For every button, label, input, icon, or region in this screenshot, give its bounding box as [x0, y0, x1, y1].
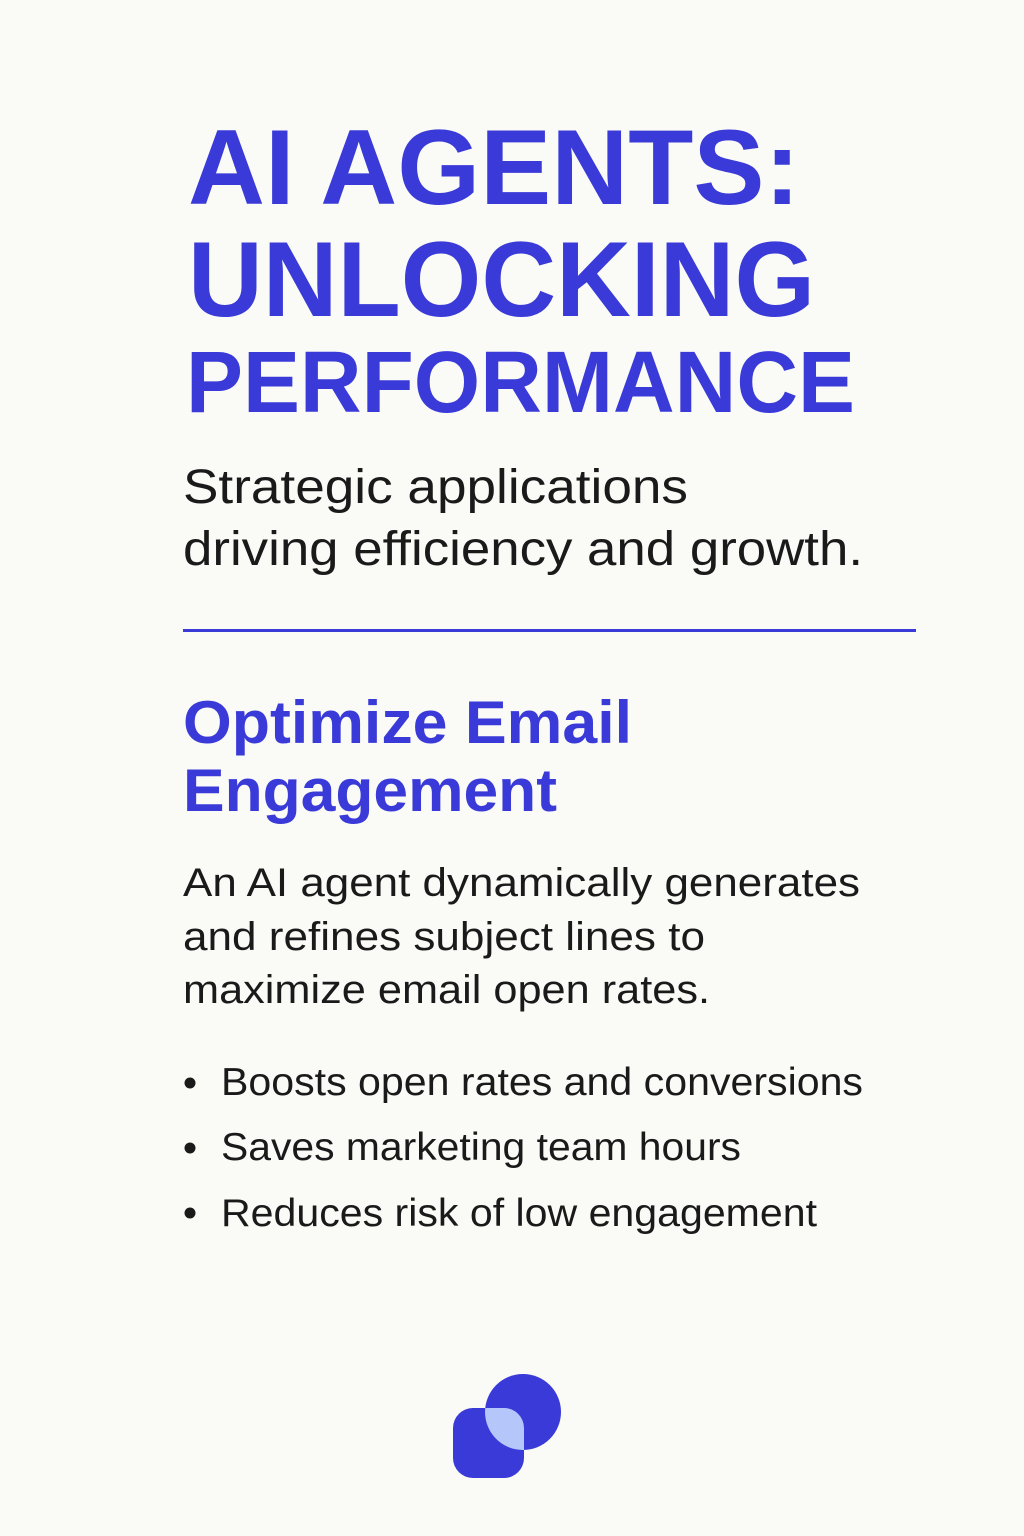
subtitle: Strategic applications	[183, 461, 688, 514]
section heading: Engagement	[183, 757, 557, 824]
bullet list: Saves marketing team hours	[221, 1126, 741, 1169]
bullet list	[184, 1061, 863, 1235]
title: AI AGENTS:	[188, 107, 800, 227]
section heading: Optimize Email	[183, 689, 632, 756]
bullet list: Reduces risk of low engagement	[221, 1192, 817, 1235]
description paragraph: and refines subject lines to	[183, 915, 705, 959]
title	[186, 107, 855, 431]
bullet list: Boosts open rates and conversions	[221, 1061, 863, 1104]
subtitle: driving efficiency and growth.	[183, 523, 863, 576]
section heading	[183, 689, 632, 824]
description paragraph: An AI agent dynamically generates	[183, 861, 860, 905]
description paragraph: maximize email open rates.	[183, 968, 710, 1012]
title: PERFORMANCE	[186, 334, 855, 431]
title: UNLOCKING	[188, 219, 815, 339]
description paragraph	[183, 861, 860, 1012]
subtitle	[183, 461, 863, 576]
icon: logo	[453, 1374, 561, 1478]
